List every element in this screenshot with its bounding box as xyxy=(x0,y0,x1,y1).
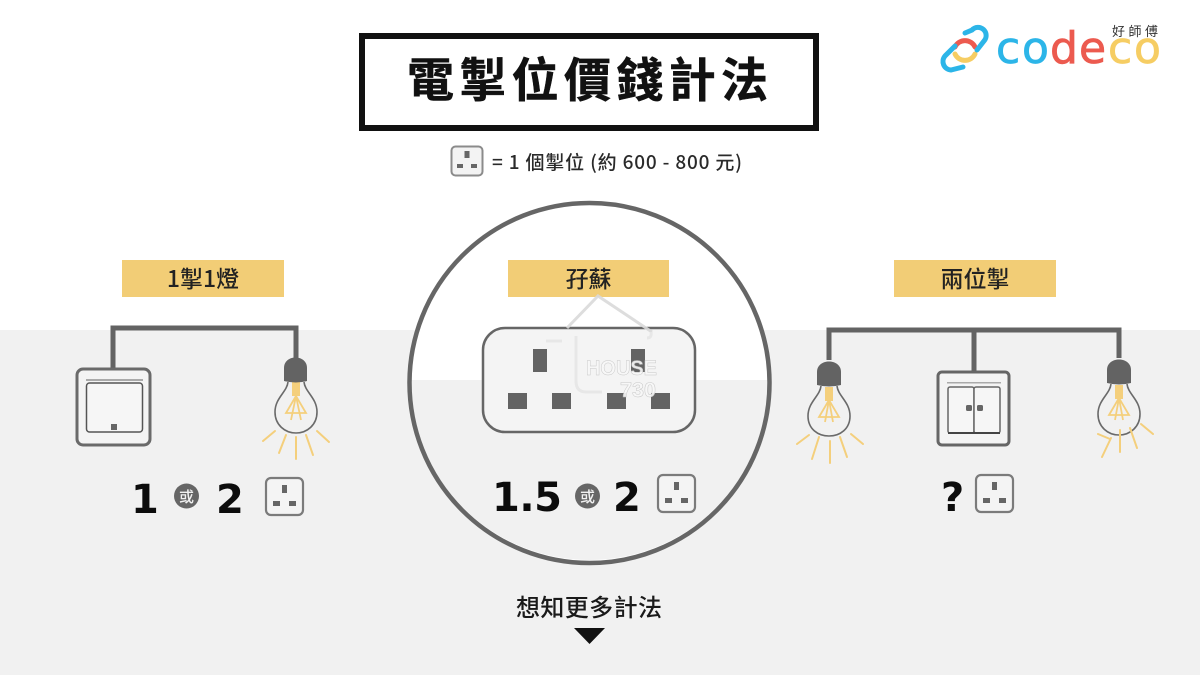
label: 孖蘇: 孖蘇 xyxy=(566,260,612,294)
title: 電掣位價錢計法 xyxy=(407,42,768,111)
icon: double light switch xyxy=(938,372,1009,445)
watermark: HOUSE 730: HOUSE xyxy=(586,357,657,380)
call to action xyxy=(516,588,662,644)
logo wordmark: e xyxy=(1079,23,1106,74)
wire xyxy=(829,330,1119,372)
count: 1.5 or 2 sockets: 2 xyxy=(613,475,641,521)
icon: right light bulb xyxy=(1098,360,1153,457)
label: 兩位掣: 兩位掣 xyxy=(940,260,1010,294)
watermark: HOUSE 730 xyxy=(546,296,657,402)
label: 1掣1燈 xyxy=(122,260,284,297)
icon: single light switch xyxy=(77,369,150,445)
watermark: HOUSE 730: 730 xyxy=(620,379,656,402)
panel: two-gang switch xyxy=(797,260,1153,521)
grey lower background xyxy=(0,330,1200,675)
icon: socket xyxy=(266,478,303,515)
badge: or xyxy=(575,484,600,508)
arrow down xyxy=(574,628,605,644)
icon: light bulb xyxy=(263,358,329,459)
panel: 1 switch 1 light xyxy=(77,260,329,523)
label: 兩位掣 xyxy=(894,260,1056,297)
logo chain icon xyxy=(943,27,986,70)
title box xyxy=(362,36,816,128)
logo chinese name: 好師傅 xyxy=(1112,21,1158,40)
count: unknown sockets: ? xyxy=(941,475,964,521)
logo wordmark: c xyxy=(996,23,1020,74)
logo: codeco xyxy=(943,21,1161,74)
legend: socket equals one switch point: = 1 個掣位 (約 600 - 800 元) xyxy=(492,148,742,175)
icon: twin socket xyxy=(483,328,695,432)
logo wordmark: d xyxy=(1050,23,1078,74)
label: 孖蘇 xyxy=(508,260,669,297)
badge: or xyxy=(174,484,199,508)
icon: left light bulb xyxy=(797,362,863,463)
label: 1掣1燈: 1掣1燈 xyxy=(167,260,239,294)
call to action: 想知更多計法 xyxy=(516,588,662,623)
badge: or: 或 xyxy=(580,486,595,507)
count: 1 or 2 sockets: 2 xyxy=(216,477,244,523)
logo wordmark: o xyxy=(1134,23,1161,74)
highlight circle xyxy=(410,203,770,563)
icon: socket xyxy=(976,475,1013,512)
wire xyxy=(113,328,296,368)
icon: socket xyxy=(658,475,695,512)
count: 1.5 or 2 sockets xyxy=(492,475,695,521)
logo wordmark: o xyxy=(1022,23,1049,74)
count: 1.5 or 2 sockets: 1.5 xyxy=(492,475,562,521)
count: 1 or 2 sockets xyxy=(131,477,303,523)
panel: twin socket xyxy=(483,260,695,521)
count: unknown sockets xyxy=(941,475,1013,521)
count: 1 or 2 sockets: 1 xyxy=(131,477,159,523)
logo wordmark: c xyxy=(1108,23,1132,74)
badge: or: 或 xyxy=(179,486,194,507)
